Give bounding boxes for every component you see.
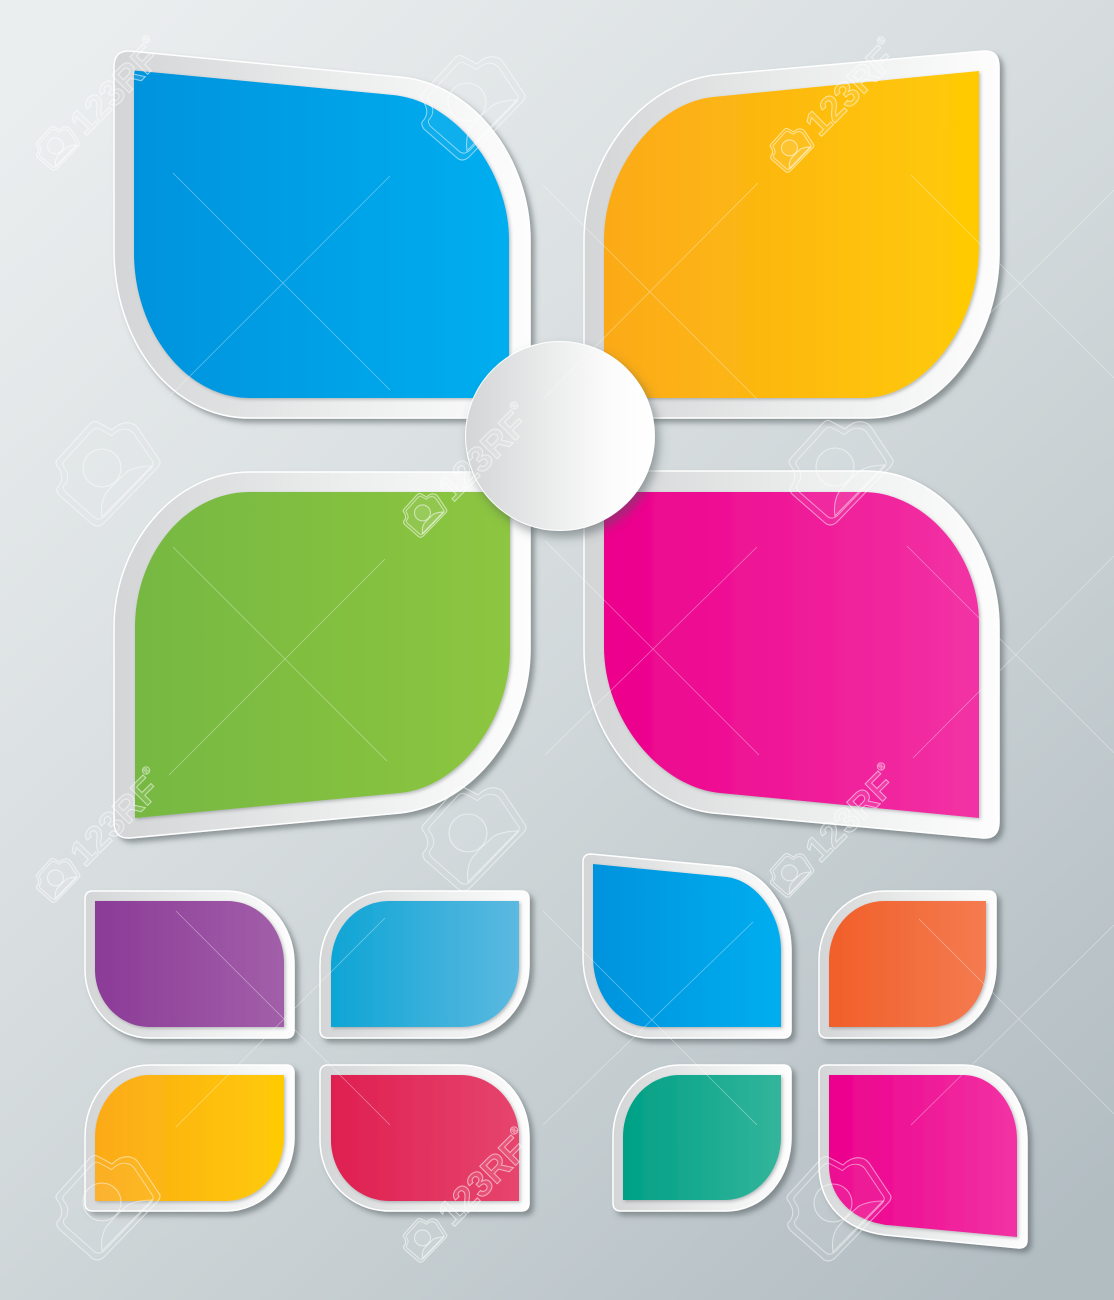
- petal: large orange: [584, 51, 999, 418]
- watermark overlay: 123RF: [430, 1128, 535, 1234]
- petal: large blue: [114, 51, 530, 418]
- centre disc: [466, 342, 654, 530]
- small petal: yellow: [85, 1065, 294, 1211]
- watermark overlay: 123RF: [430, 403, 535, 509]
- watermark overlay: ®: [139, 33, 154, 47]
- small petal: sky blue: [320, 891, 529, 1038]
- watermark overlay: ®: [507, 399, 522, 413]
- small petal: magenta: [819, 1065, 1027, 1248]
- small petal: coral: [819, 891, 996, 1038]
- petal: large green: [114, 472, 530, 838]
- small petal: teal: [613, 1065, 791, 1211]
- small petal: crimson: [320, 1065, 529, 1211]
- petal: large magenta: [584, 471, 999, 838]
- watermark overlay: 123RF: [797, 38, 902, 144]
- watermark overlay: ®: [507, 1124, 522, 1138]
- watermark overlay: 123RF: [797, 764, 902, 870]
- watermark overlay: 123RF: [62, 768, 167, 874]
- watermark overlay: 123RF: [62, 37, 167, 143]
- small petal: blue: [583, 854, 791, 1038]
- small petal: purple: [85, 891, 294, 1038]
- watermark overlay: ®: [874, 760, 889, 774]
- watermark overlay: ®: [139, 764, 154, 778]
- watermark overlay: ®: [874, 34, 889, 48]
